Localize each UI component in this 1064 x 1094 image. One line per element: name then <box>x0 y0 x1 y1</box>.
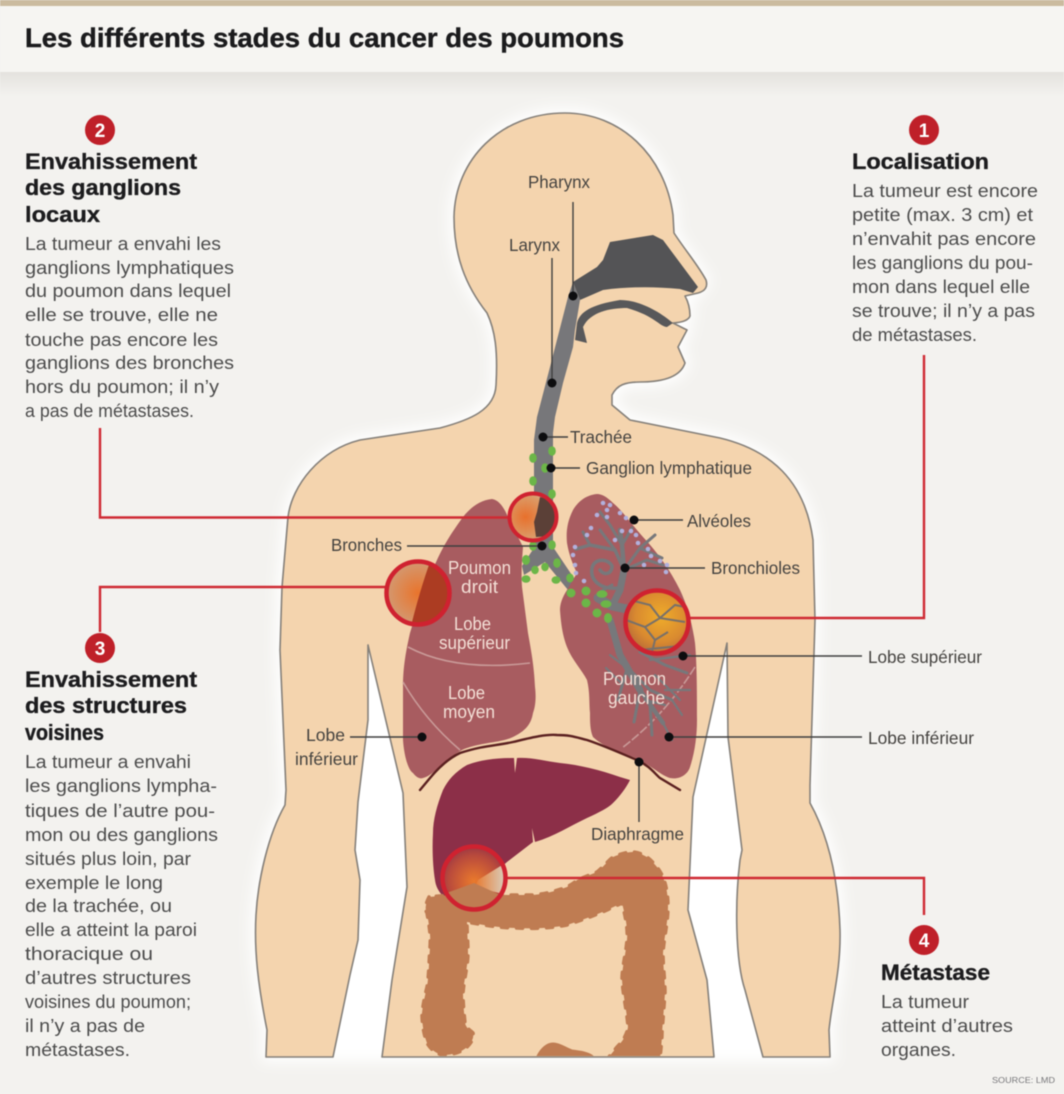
alveoli <box>571 501 669 583</box>
tumour: stage 1 <box>622 588 692 656</box>
text: stage 3: La tumeur a envahi <box>25 751 191 772</box>
text: stage 3: métastases. <box>25 1039 130 1060</box>
heading: stage 2: Envahissement <box>25 149 198 174</box>
text: stage 1: n’envahit pas encore <box>852 228 1036 249</box>
diaphragm <box>420 735 680 790</box>
heading: stage 2 <box>25 149 198 227</box>
heading: stage 1: Localisation <box>852 149 989 174</box>
header band <box>0 0 1064 96</box>
text: stage 2: hors du poumon; il n’y <box>25 376 220 397</box>
lung labels: supérieur <box>439 633 510 653</box>
pharynx and trachea <box>522 282 610 618</box>
text: stage 2: touche pas encore les <box>25 329 218 350</box>
tumour: stage 3 <box>385 560 452 626</box>
heading: stage 2: des ganglions <box>25 175 181 200</box>
tumour: stage 4 <box>441 845 507 915</box>
text: stage 4: organes. <box>881 1039 956 1060</box>
panel: stage 4 <box>881 925 1013 1060</box>
lung labels <box>439 558 666 722</box>
callout dots <box>418 292 688 766</box>
text: stage 2: La tumeur a envahi les <box>25 233 221 254</box>
anatomical labels: Lobe <box>306 725 345 745</box>
text: stage 2: elle se trouve, elle ne <box>25 304 218 325</box>
lung labels: droit <box>461 577 498 597</box>
heading: stage 3: des structures <box>25 693 187 718</box>
text: stage 1: les ganglions du pou- <box>852 252 1033 273</box>
panel: stage 3 <box>25 633 218 1060</box>
text: stage 4: La tumeur <box>881 991 969 1012</box>
badge 1 <box>909 115 939 145</box>
badge 2: 2 <box>95 121 105 142</box>
text: stage 3: voisines du poumon; <box>25 991 191 1012</box>
badge 4: 4 <box>919 931 930 952</box>
text: stage 3: tiques de l’autre pou- <box>25 800 215 821</box>
text: stage 3: thoracique ou <box>25 943 153 964</box>
lung labels: Poumon <box>448 558 511 578</box>
badge 3 <box>85 633 115 663</box>
text: stage 1: petite (max. 3 cm) et <box>852 204 1033 225</box>
badge 1: 1 <box>919 121 930 142</box>
left lung <box>560 494 697 778</box>
text: stage 1 <box>852 180 1038 345</box>
lymph nodes <box>522 446 612 623</box>
text: stage 3: les ganglions lympha- <box>25 775 217 796</box>
mouth cavity <box>575 300 673 343</box>
text: stage 2: ganglions des bronches <box>25 352 234 373</box>
heading: stage 3: Envahissement <box>25 667 198 692</box>
text: stage 1: mon dans lequel elle <box>852 276 1030 297</box>
title: Les différents stades du cancer des poumons <box>25 23 624 53</box>
tumour: stage 2 <box>508 492 558 542</box>
lung labels: Lobe <box>454 614 491 634</box>
anatomical labels: Pharynx <box>528 172 590 192</box>
anatomical labels: Trachée <box>570 427 632 447</box>
anatomical labels <box>295 172 982 844</box>
heading: stage 4: Métastase <box>881 960 990 985</box>
lung labels: Lobe <box>448 683 485 703</box>
anatomical labels: Lobe inférieur <box>868 728 974 748</box>
lobe fissures <box>403 647 695 750</box>
callout lines <box>350 202 862 822</box>
text: stage 3: mon ou des ganglions <box>25 824 218 845</box>
text: stage 3: il n’y a pas de <box>25 1015 145 1036</box>
text: stage 2 <box>25 233 234 421</box>
text: stage 3: de la trachée, ou <box>25 895 172 916</box>
anatomical labels: Ganglion lymphatique <box>586 458 752 478</box>
anatomical labels: inférieur <box>295 749 358 769</box>
anatomical labels: Lobe supérieur <box>868 647 982 667</box>
text: stage 1: se trouve; il n’y a pas <box>852 300 1035 321</box>
anatomical labels: Bronchioles <box>711 558 800 578</box>
heading: stage 3 <box>25 667 198 745</box>
text: stage 4: atteint d’autres <box>881 1015 1013 1036</box>
anatomical labels: Alvéoles <box>687 511 751 531</box>
source credit: SOURCE: LMD <box>992 1075 1055 1085</box>
text: stage 2: ganglions lymphatiques <box>25 257 234 278</box>
badge 3: 3 <box>95 639 105 660</box>
anatomical labels: Larynx <box>509 235 560 255</box>
text: stage 4 <box>881 991 1013 1060</box>
lung labels: Poumon <box>603 669 666 689</box>
anatomical labels: Bronches <box>331 535 402 555</box>
colon <box>422 852 668 1058</box>
panel: stage 2 <box>25 115 234 421</box>
lung labels: moyen <box>443 702 495 722</box>
text: stage 3: situés plus loin, par <box>25 848 191 869</box>
text: stage 3 <box>25 751 218 1060</box>
red leader lines <box>100 355 924 915</box>
text: stage 3: elle a atteint la paroi <box>25 919 197 940</box>
heading: stage 2: locaux <box>25 202 101 227</box>
text: stage 1: La tumeur est encore <box>852 180 1038 201</box>
text: stage 2: du poumon dans lequel <box>25 280 231 301</box>
lung labels: gauche <box>608 688 665 708</box>
text: stage 3: exemple le long <box>25 872 163 893</box>
text: stage 2: a pas de métastases. <box>25 400 194 421</box>
text: stage 1: de métastases. <box>852 324 977 345</box>
anatomical labels: Diaphragme <box>591 824 684 844</box>
liver <box>433 758 630 896</box>
heading: stage 3: voisines <box>25 720 104 745</box>
text: stage 3: d’autres structures <box>25 967 191 988</box>
bronchiole tree <box>576 512 690 740</box>
panel: stage 1 <box>852 115 1038 345</box>
human body silhouette <box>255 113 840 1057</box>
badge 2 <box>85 115 115 145</box>
right lung <box>403 499 536 778</box>
body glow <box>255 113 840 1057</box>
nasal cavity <box>573 235 698 300</box>
